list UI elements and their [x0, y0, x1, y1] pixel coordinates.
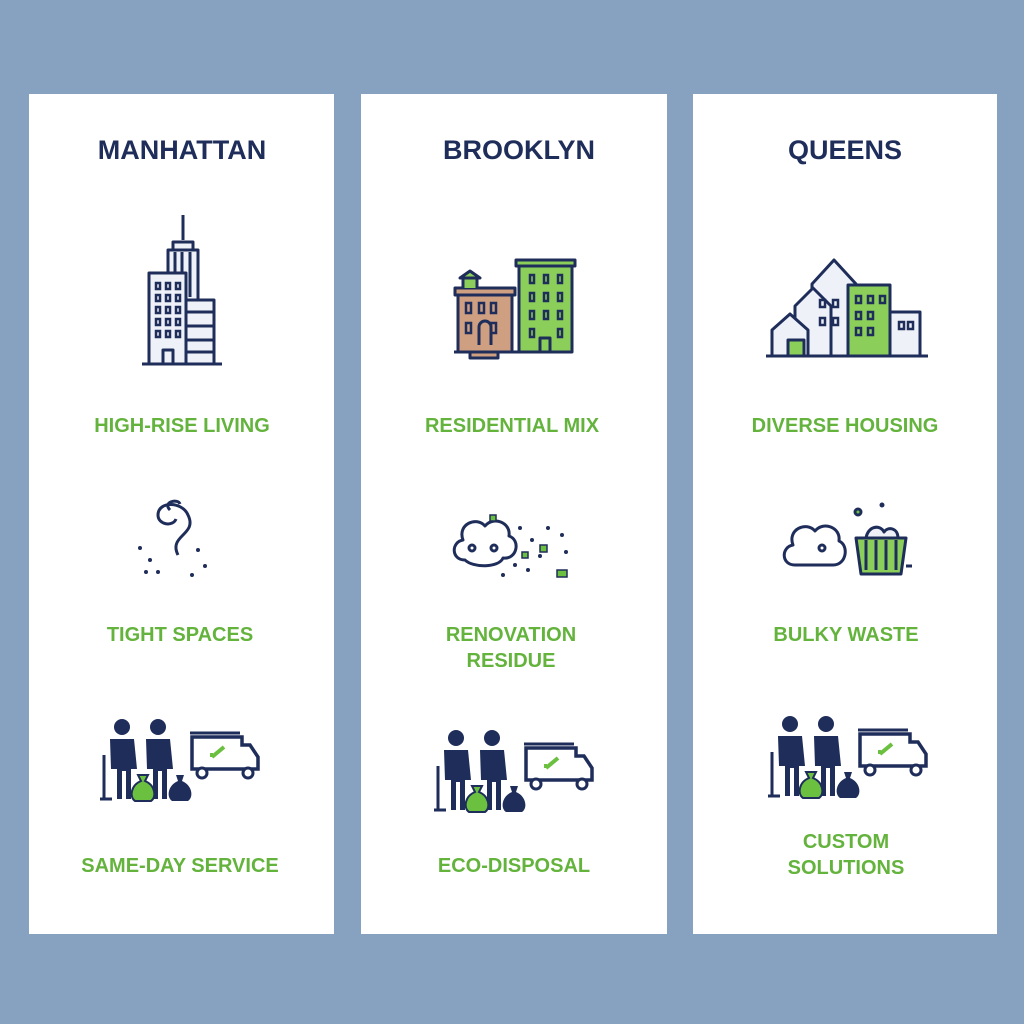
- label: eco-disposal: ECO-DISPOSAL: [438, 855, 590, 877]
- icon: houses: [766, 260, 928, 356]
- panel: queens: SOLUTIONS: [788, 857, 904, 879]
- title: brooklyn: BROOKLYN: [443, 135, 595, 165]
- icon: skyscraper: [142, 215, 222, 364]
- label: bulky waste: BULKY WASTE: [773, 624, 919, 646]
- icon: smoke swirl: [138, 501, 207, 577]
- label: residential mix: RESIDENTIAL MIX: [425, 415, 600, 437]
- label: tight spaces: TIGHT SPACES: [107, 624, 253, 646]
- icon: cloud and dumpster: [784, 502, 912, 574]
- icon: crew manhattan: [100, 719, 258, 801]
- title: queens: QUEENS: [788, 135, 902, 165]
- title: manhattan: MANHATTAN: [98, 135, 266, 165]
- panel: manhattan: [29, 94, 334, 934]
- label: same-day: SAME-DAY SERVICE: [81, 855, 279, 877]
- label: high-rise: HIGH-RISE LIVING: [94, 415, 270, 437]
- panel: brooklyn: RESIDUE: [467, 650, 555, 672]
- panel: queens: [693, 94, 997, 934]
- icon: crew brooklyn: [434, 730, 592, 812]
- panel: brooklyn: [361, 94, 667, 934]
- icon: crew queens: [768, 716, 926, 798]
- label: diverse housing: DIVERSE HOUSING: [752, 415, 938, 437]
- label: renovation residue: RENOVATION: [446, 624, 576, 646]
- icon: dust cloud: [454, 515, 568, 577]
- icon: brownstone and apartment: [454, 260, 575, 358]
- label: custom solutions: CUSTOM: [803, 831, 889, 853]
